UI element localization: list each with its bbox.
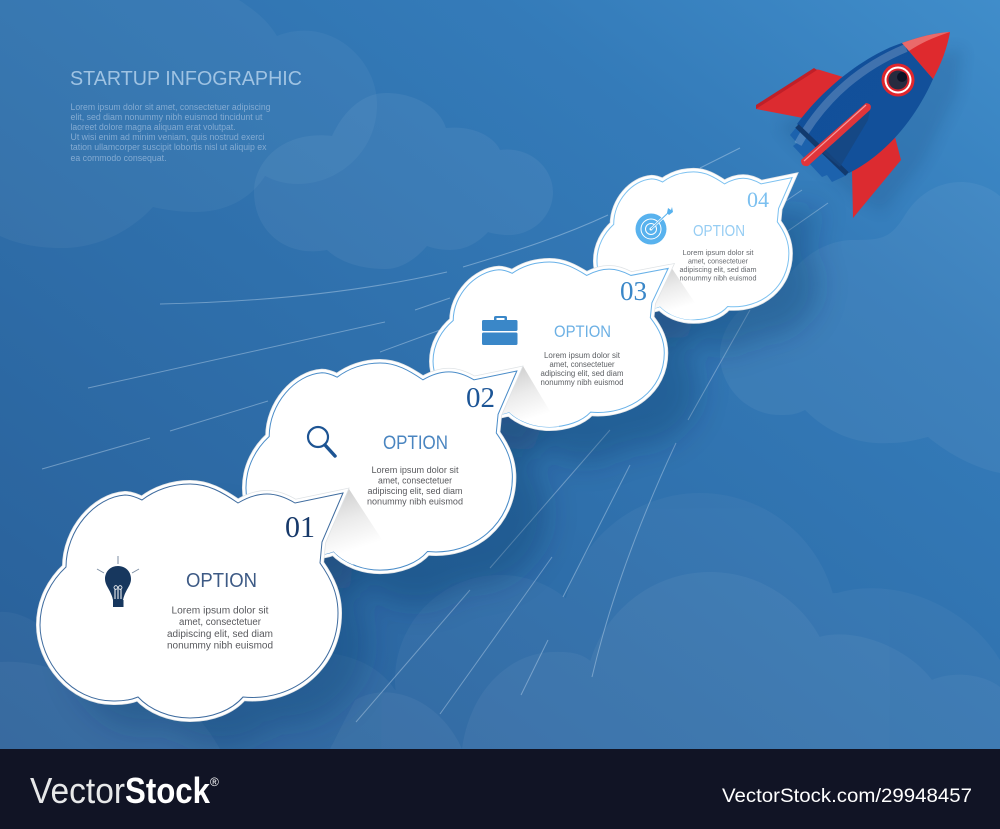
text block 04: nonummy nibh euismod [680, 274, 756, 282]
text block 02: amet, consectetuer [378, 476, 452, 486]
intro paragraph: tation ullamcorper suscipit lobortis nisl ut aliquip ex [70, 142, 267, 152]
intro paragraph: ea commodo consequat. [70, 153, 166, 163]
text block 04: adipiscing elit, sed diam [680, 265, 756, 274]
red wing strip [801, 103, 871, 166]
heading option 03: OPTION [554, 322, 611, 341]
heading option 04: OPTION [693, 223, 745, 240]
footer bar [0, 749, 1000, 829]
icon: magnifier [308, 427, 335, 456]
panel: option 01 [40, 484, 343, 718]
speed streak lines [42, 148, 828, 722]
fold under 02 tail [502, 366, 559, 427]
text block 02: nonummy nibh euismod [367, 496, 463, 506]
text block 04: Lorem ipsum dolor sit [682, 248, 754, 257]
text block 04: amet, consectetuer [688, 256, 748, 266]
intro paragraph: elit, sed diam nonummy nibh euismod tincidunt ut [70, 112, 263, 122]
footer url: VectorStock.com/29948457 [722, 785, 972, 807]
nose cone [902, 32, 950, 79]
background cloud: right [720, 182, 1000, 473]
text block 02: Lorem ipsum dolor sit [372, 465, 459, 475]
title: STARTUP INFOGRAPHIC [70, 67, 302, 90]
text block 01: adipiscing elit, sed diam [167, 629, 273, 640]
dark band [797, 126, 847, 174]
intro paragraph [70, 102, 270, 163]
body highlight band [798, 48, 906, 144]
text block 04 [680, 248, 756, 282]
number 03: 03 [620, 276, 647, 306]
rocket [756, 32, 963, 218]
background clouds: bottom back layer [0, 493, 1000, 790]
panel: option 03 [433, 262, 668, 427]
fold under 03 tail [655, 269, 704, 320]
footer logo: ® [210, 775, 219, 789]
number 02: 02 [466, 382, 495, 414]
text block 01: Lorem ipsum dolor sit [172, 606, 269, 616]
text block 03 [540, 351, 624, 387]
text block 01: amet, consectetuer [179, 617, 262, 628]
rocket shadow [778, 48, 963, 213]
panel: option 02 [246, 363, 517, 570]
text block 03: adipiscing elit, sed diam [540, 369, 624, 378]
number 01: 01 [285, 509, 315, 544]
text block 02: adipiscing elit, sed diam [368, 486, 462, 496]
background cloud: centre top [254, 93, 553, 269]
intro paragraph: laoreet dolore magna aliquam erat volutpat. [70, 122, 236, 132]
porthole [882, 64, 914, 96]
rocket tail steps [790, 105, 870, 182]
wing shade [823, 110, 870, 167]
text block 01 [167, 606, 273, 652]
panel: option 04 [597, 172, 792, 320]
text block 01: nonummy nibh euismod [167, 640, 273, 652]
text block 02 [367, 465, 463, 506]
soft shadows under clouds [70, 202, 822, 746]
intro paragraph: Ut wisi enim ad minim veniam, quis nostrud exerci [70, 132, 264, 142]
intro paragraph: Lorem ipsum dolor sit amet, consectetuer adipiscing [70, 102, 270, 112]
background cloud: top left [0, 0, 377, 248]
background clouds: bottom front layer [0, 572, 1000, 822]
heading option 02: OPTION [383, 433, 448, 454]
footer logo: Stock [125, 770, 211, 811]
heading option 01: OPTION [186, 569, 257, 592]
text block 03: amet, consectetuer [550, 360, 615, 369]
rocket body [797, 43, 933, 173]
icon: briefcase [482, 316, 518, 345]
fold under 01 tail [324, 489, 375, 564]
left fin [756, 70, 843, 118]
icon: target [636, 207, 673, 244]
icon: light bulb [97, 556, 139, 607]
text block 03: Lorem ipsum dolor sit [544, 351, 621, 360]
footer logo: Vector [30, 770, 125, 811]
footer logo [30, 770, 219, 811]
right fin [852, 137, 901, 218]
text block 03: nonummy nibh euismod [540, 378, 624, 387]
number 04: 04 [747, 187, 769, 212]
